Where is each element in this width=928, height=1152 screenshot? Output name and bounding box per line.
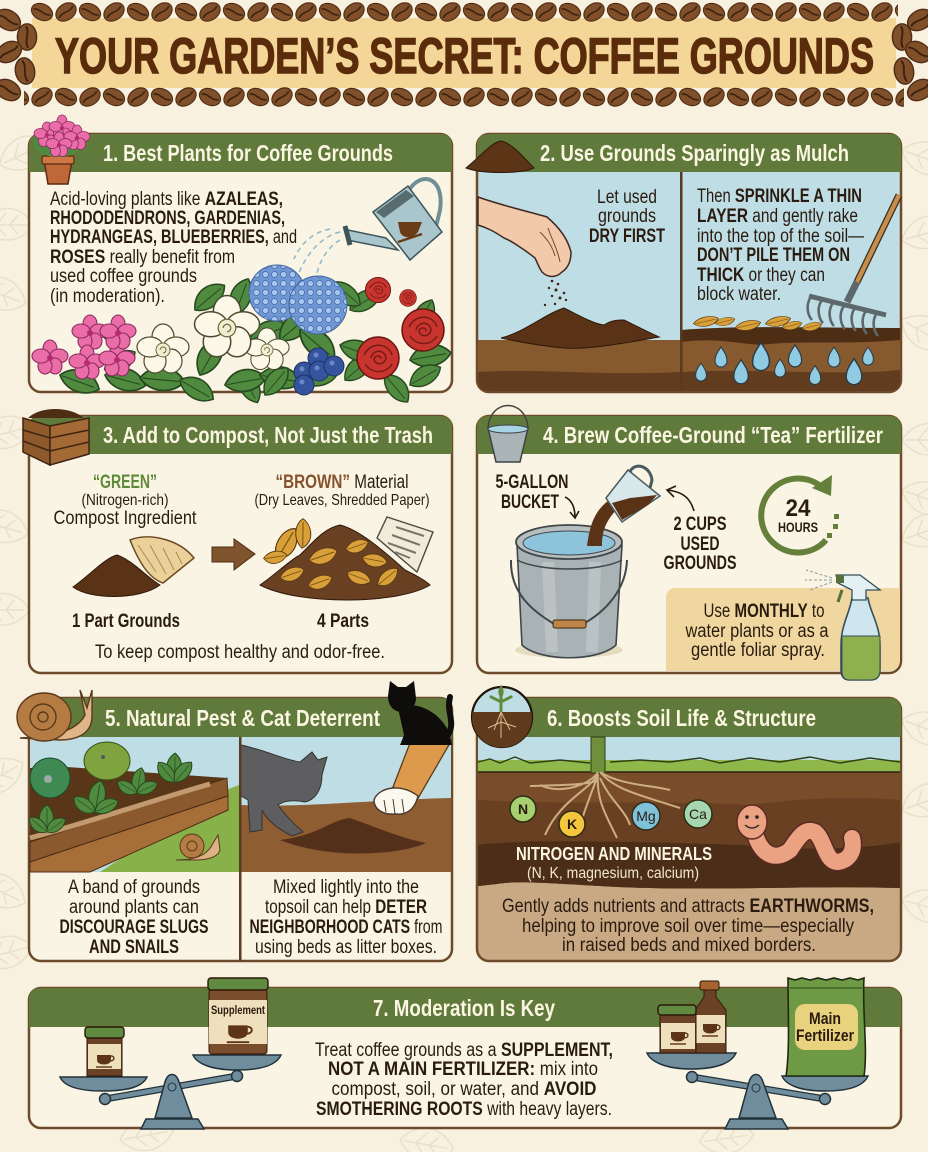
main fertilizer bag: Fertilizer	[796, 1026, 854, 1045]
nutrient badges: K	[567, 816, 577, 832]
hand sprinkling	[478, 197, 571, 306]
panel 7 text	[315, 1040, 613, 1120]
panel 2 header	[477, 134, 901, 172]
supplement jar	[208, 978, 268, 1054]
water drops	[696, 343, 873, 385]
icon: potted azalea	[33, 115, 90, 184]
ratio labels: 4 Parts	[317, 611, 369, 632]
supplement jar: Supplement	[211, 1003, 265, 1017]
panel 7 header	[29, 988, 901, 1027]
step 2 text: DON’T PILE THEM ON	[697, 245, 850, 266]
panel 6 heading: 6. Boosts Soil Life & Structure	[547, 705, 816, 731]
panel 7 heading: 7. Moderation Is Key	[373, 995, 555, 1021]
panel 7 text: compost, soil, or water, and AVOID	[332, 1079, 596, 1100]
clock: 24 hours	[761, 475, 839, 553]
panel 5 right text	[250, 877, 442, 958]
cups label: USED	[680, 534, 720, 555]
panel 1 text: RHODODENDRONS, GARDENIAS,	[50, 208, 285, 229]
step 1 text: Let used	[597, 187, 657, 208]
panel 7 text: SMOTHERING ROOTS with heavy layers.	[316, 1099, 612, 1120]
left scale	[60, 978, 281, 1129]
icon: compost bin	[23, 409, 89, 465]
icon: seedling circle	[472, 687, 532, 747]
panel 1 text: Acid-loving plants like AZALEAS,	[50, 189, 283, 210]
callout text: gentle foliar spray.	[691, 640, 825, 661]
brown bottle	[695, 981, 726, 1053]
right scale	[647, 978, 868, 1129]
callout box	[666, 588, 900, 671]
callout text: water plants or as a	[685, 621, 829, 642]
green label: Compost Ingredient	[54, 508, 197, 529]
icon: watering can	[294, 179, 442, 277]
nutrient badges: Ca	[689, 806, 707, 822]
panel 5 left text: around plants can	[69, 897, 199, 918]
nutrient badges: N	[518, 801, 528, 817]
panel 6 text: Gently adds nutrients and attracts EARTHWORMS,	[502, 896, 874, 917]
panel 5 heading: 5. Natural Pest & Cat Deterrent	[105, 705, 380, 731]
step 1 text	[589, 187, 665, 247]
panel 5 right text: using beds as litter boxes.	[255, 937, 437, 958]
nitrogen label	[516, 844, 712, 882]
icon: snail	[17, 690, 92, 741]
brown label: “BROWN” Material	[276, 472, 408, 493]
cat digging scene	[239, 737, 451, 961]
ratio labels: 1 Part Grounds	[72, 611, 180, 632]
panel 3: compost	[23, 409, 452, 673]
main fertilizer bag: Main	[809, 1009, 841, 1028]
large bucket	[511, 498, 627, 658]
bucket label: 5-GALLON	[496, 472, 568, 493]
cups label	[664, 514, 736, 574]
step 2 text: block water.	[697, 284, 781, 305]
title banner	[0, 0, 928, 109]
brown label	[254, 472, 430, 509]
panel 6 text	[502, 896, 874, 956]
panel 6 text: in raised beds and mixed borders.	[562, 935, 816, 956]
panel 5 right text: NEIGHBORHOOD CATS from	[250, 917, 442, 938]
panel 6 text: helping to improve soil over time—especially	[522, 916, 854, 937]
panel 5 header	[29, 698, 452, 737]
main fertilizer bag	[786, 978, 865, 1076]
clock: 24 hours: HOURS	[778, 519, 818, 535]
panel 6: soil life	[472, 687, 901, 961]
panel 1: best plants	[29, 115, 453, 407]
step 2 text	[697, 186, 864, 305]
icon: black cat	[388, 681, 452, 745]
panel 1 text: used coffee grounds	[50, 266, 197, 287]
grounds pile and coffee filter	[73, 537, 194, 597]
ratio labels	[72, 611, 369, 632]
panel 5 right text: Mixed lightly into the	[273, 877, 419, 898]
panel 5: pest and cat deterrent	[17, 681, 452, 961]
panel 1 header	[29, 134, 452, 172]
callout text	[685, 601, 829, 661]
orange cat paw	[374, 743, 450, 814]
soil scene	[478, 172, 900, 391]
bucket label	[496, 472, 579, 518]
nitrogen label: NITROGEN AND MINERALS	[516, 844, 712, 864]
panel 6 header	[477, 698, 901, 737]
green label: (Nitrogen-rich)	[82, 492, 168, 509]
panel 1 text	[50, 189, 297, 307]
arrow	[212, 539, 255, 570]
panel 1 text: ROSES really benefit from	[50, 247, 235, 268]
panel 3 heading: 3. Add to Compost, Not Just the Trash	[103, 422, 433, 448]
right jar	[658, 1005, 696, 1053]
panel 1 heading: 1. Best Plants for Coffee Grounds	[103, 140, 393, 166]
soil cross-section	[478, 737, 900, 889]
earthworm	[737, 805, 853, 862]
panel 2: mulch	[466, 134, 901, 392]
spray bottle	[805, 570, 880, 680]
panel 7 text: NOT A MAIN FERTILIZER: mix into	[328, 1059, 598, 1080]
panel 3 caption: To keep compost healthy and odor-free.	[95, 642, 385, 663]
panel 4 header	[477, 416, 901, 454]
small jar	[85, 1027, 124, 1076]
clock: 24 hours: 24	[786, 495, 811, 522]
cups label: GROUNDS	[664, 553, 736, 574]
brown pile with leaves and newspaper	[260, 517, 433, 600]
panel 7 text: Treat coffee grounds as a SUPPLEMENT,	[315, 1040, 613, 1061]
tree trunk	[591, 737, 605, 773]
step 2 text: Then SPRINKLE A THIN	[697, 186, 862, 207]
nutrient badges: Mg	[636, 808, 656, 824]
nutrient badges	[510, 796, 712, 837]
arrow to cup	[667, 486, 694, 511]
icon: grounds pile	[466, 141, 534, 172]
nitrogen label: (N, K, magnesium, calcium)	[527, 865, 699, 882]
callout text: Use MONTHLY to	[704, 601, 824, 622]
bucket label: BUCKET	[501, 492, 559, 513]
step 2 text: into the top of the soil—	[697, 226, 864, 247]
plants row	[32, 265, 453, 407]
panel 5 left text: DISCOURAGE SLUGS	[60, 917, 208, 938]
panel 3 header	[29, 416, 452, 454]
cups label: 2 CUPS	[674, 514, 726, 535]
panel 5 left text: AND SNAILS	[89, 937, 179, 958]
pouring cup	[606, 466, 660, 522]
icon: small bucket	[488, 406, 528, 462]
panel 4: coffee tea	[477, 406, 901, 680]
panel 5 right text: topsoil can help DETER	[265, 897, 427, 918]
brown label: (Dry Leaves, Shredded Paper)	[254, 492, 430, 509]
green label	[54, 472, 197, 529]
step 1 text: grounds	[598, 206, 656, 227]
small snail	[176, 834, 220, 860]
step 1 text: DRY FIRST	[589, 226, 665, 247]
plant roots	[530, 772, 680, 838]
panel 7: moderation	[29, 978, 901, 1129]
panel 2 heading: 2. Use Grounds Sparingly as Mulch	[540, 140, 849, 166]
step 2 text: LAYER and gently rake	[697, 206, 858, 227]
green label: “GREEN”	[93, 472, 157, 493]
panel 5 left text: A band of grounds	[68, 877, 200, 898]
panel 1 text: (in moderation).	[50, 286, 165, 307]
step 2 text: THICK or they can	[697, 265, 825, 286]
panel 5 left text	[60, 877, 208, 958]
panel 1 text: HYDRANGEAS, BLUEBERRIES, and	[50, 227, 297, 248]
raised bed scene	[26, 737, 239, 872]
rake	[808, 195, 899, 336]
